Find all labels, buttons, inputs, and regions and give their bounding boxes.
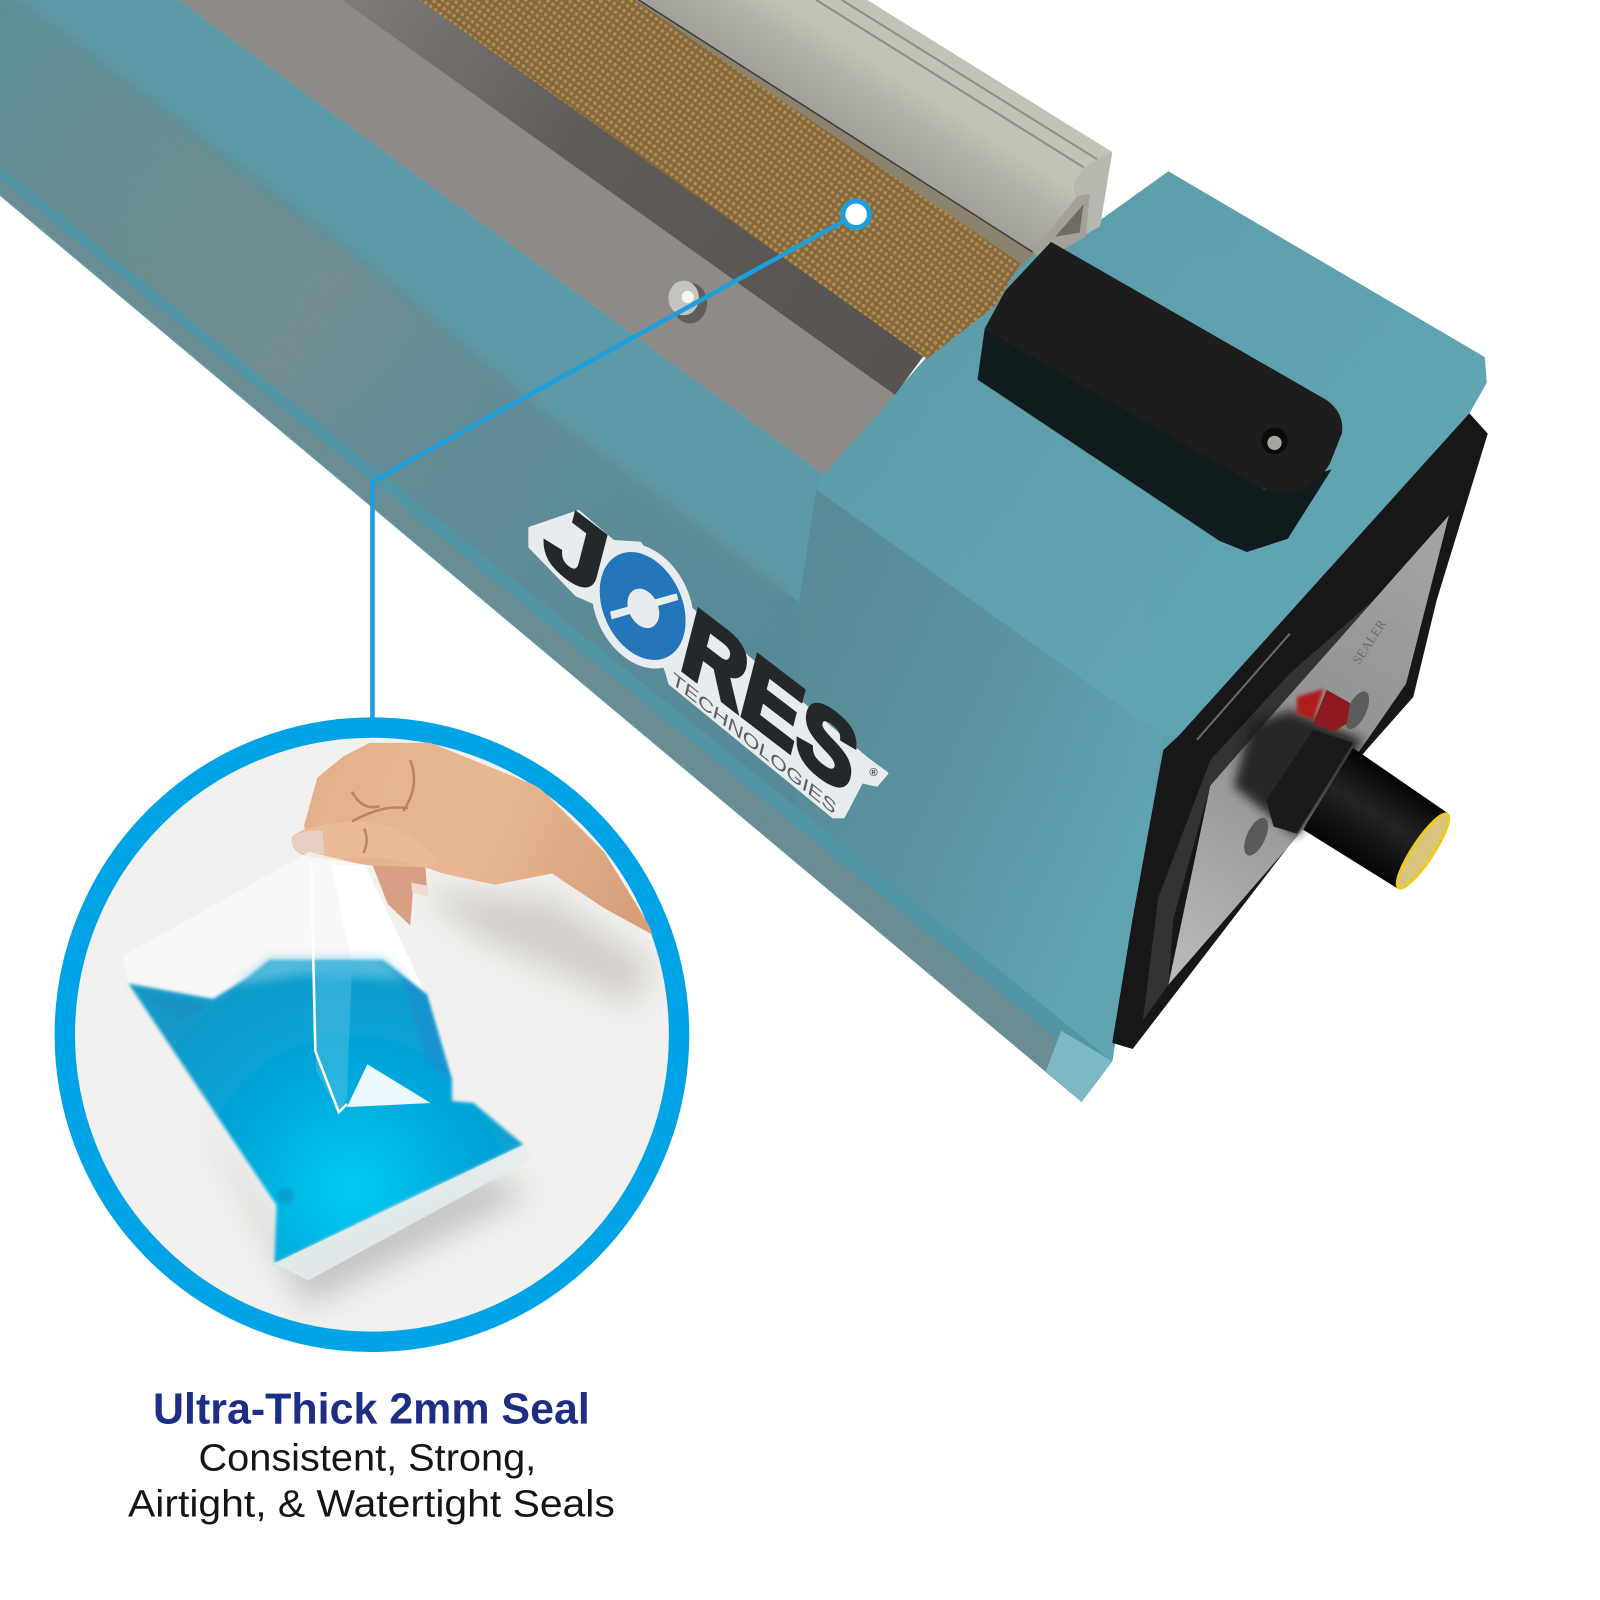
shadow behind hand [423,891,653,1005]
control panel frame [1112,413,1488,1049]
logo sticker [530,512,887,817]
sealer machine [0,0,1490,1112]
clear bag film [304,852,360,864]
head front face [796,490,1163,1061]
logo RES: RES [673,589,867,815]
circular inset photo [65,728,679,1342]
panel silver plate [1168,515,1449,985]
black clamp block [978,242,1342,552]
fold crease [311,863,347,1112]
dark plate band [342,0,927,395]
frame inner band [1143,600,1373,1020]
logo TECHNOLOGIES: TECHNOLOGIES [670,668,838,819]
lower fingers [372,865,428,926]
left wrinkle [138,990,209,1020]
back of hand [304,743,656,937]
film gather [332,865,424,992]
plate screw [668,281,707,323]
logo J: J [534,478,617,620]
bottom lip of base [0,166,1112,1102]
heat seal mesh band [419,0,1020,359]
panel reflection [1234,710,1363,837]
fold highlight [347,1064,431,1107]
registered mark: ® [869,767,878,779]
temperature knob [1266,730,1456,893]
film fold [313,960,352,1112]
callout dot [843,201,869,228]
frame highlight [1197,634,1290,740]
panel label: SEALER [1349,617,1389,667]
panel logo mark [1239,814,1273,859]
upper water fade [235,957,408,985]
body line one: Consistent, Strong, [198,1436,536,1478]
finger creases [352,760,414,853]
shadow below bag [228,1162,528,1313]
long front face [0,0,1163,1061]
block screw [1261,428,1288,454]
head top face [816,171,1487,737]
soft ridge shade [16,0,786,592]
bottom corner highlight [1046,1031,1112,1102]
thumb nail [292,830,324,854]
top strip of base [16,0,823,602]
logo O [583,538,702,674]
water edge tint [383,960,452,1082]
powder coat grain [16,189,1103,1088]
thumb [292,822,366,859]
hand [292,743,656,937]
tray underlay [419,0,1036,357]
stainless plate [179,0,895,474]
heading: Ultra-Thick 2mm Seal [153,1384,590,1433]
logo O ring [572,527,713,685]
blue liquid [129,960,523,1263]
body line two: Airtight, & Watertight Seals [128,1482,615,1524]
base silhouette [0,0,1487,1102]
caption [128,1384,615,1524]
bottom seal [274,1145,531,1281]
callout connector line [372,214,856,727]
red indicator lamp [1297,688,1374,733]
JORES logo [530,478,887,819]
lower-left bubble [278,1188,294,1204]
aluminium sealing bar [639,0,1112,261]
